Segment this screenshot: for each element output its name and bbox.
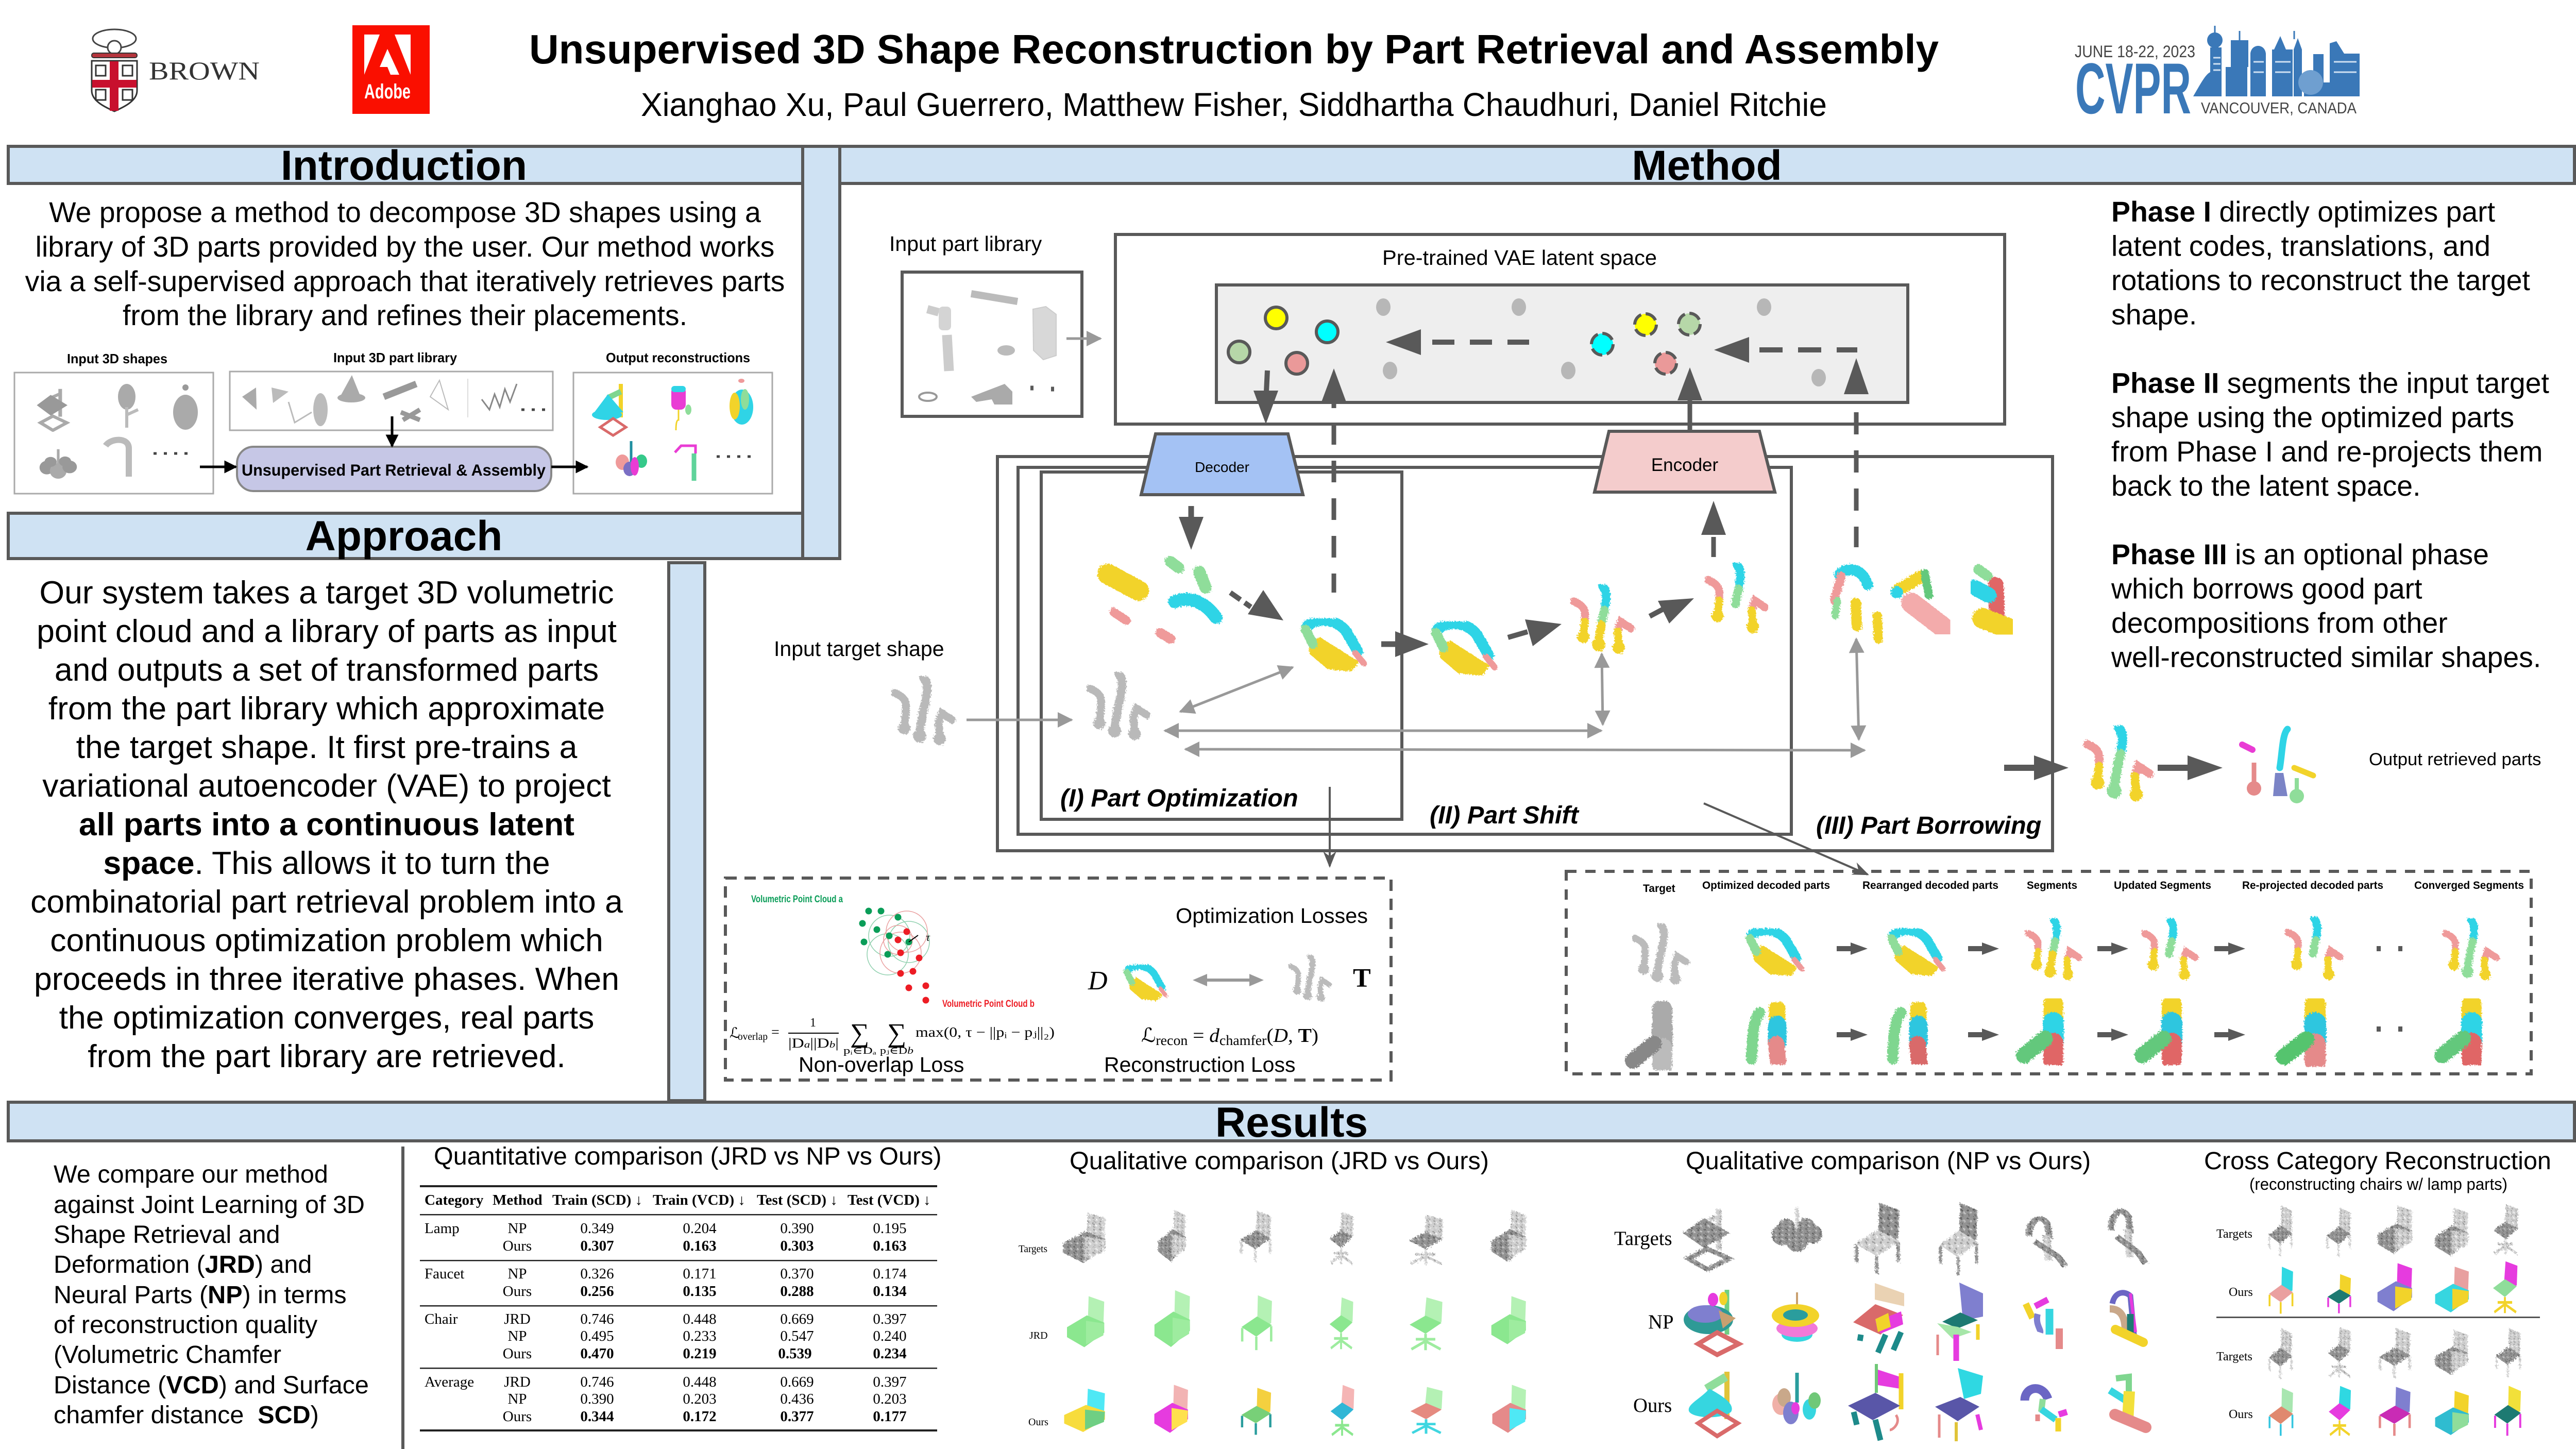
- row labels: cross category: Ours: [2229, 1408, 2253, 1421]
- label: optimization losses: Optimization Losses: [1176, 904, 1368, 928]
- text block: approach: the target shape. It first pre-trains a: [76, 729, 578, 765]
- panel: method header: [840, 142, 2574, 189]
- table: quantitative results: 0.177: [873, 1408, 907, 1425]
- block: Unsupervised Part Retrieval & Assembly: [237, 447, 551, 491]
- logo: CVPR 2023: CVPR: [2075, 48, 2191, 129]
- borrowed shape 2: [1891, 573, 1945, 629]
- panel: part library: [230, 372, 553, 430]
- table: quantitative results: Train (SCD) ↓: [552, 1192, 642, 1208]
- label: reconstruction loss: Reconstruction Loss: [1104, 1053, 1295, 1076]
- table: quantitative results: NP: [507, 1266, 527, 1282]
- decoder block: Decoder: [1195, 459, 1249, 475]
- table: quantitative results: 0.163: [683, 1238, 717, 1254]
- decoded parts (scattered): [1108, 562, 1216, 639]
- table: quantitative results: Method: [493, 1192, 543, 1208]
- text block: phases: from Phase I and re-projects them: [2111, 436, 2543, 468]
- table: quantitative results: Faucet: [425, 1266, 464, 1282]
- row labels: NP comparison: NP: [1648, 1311, 1673, 1333]
- table: quantitative results: NP: [507, 1220, 527, 1237]
- table: quantitative results: 0.233: [683, 1328, 717, 1344]
- text block: phases: Phase III is an optional phase: [2111, 538, 2489, 570]
- table: quantitative results: 0.390: [580, 1391, 614, 1407]
- table: quantitative results: 0.172: [683, 1408, 717, 1425]
- table: quantitative results: 0.303: [780, 1238, 814, 1254]
- arrow: output 2: [2158, 755, 2223, 780]
- latent codes (left): [1228, 307, 1338, 374]
- panel: optimization losses: [725, 878, 1391, 1080]
- equation: overlap loss: ∑: [887, 1019, 906, 1048]
- column headers: Segments: [2027, 880, 2077, 891]
- panel: pre-trained VAE latent space: [1115, 234, 2005, 424]
- equation: reconstruction loss: (: [1266, 1025, 1274, 1047]
- text block: approach: variational autoencoder (VAE) to project: [42, 768, 611, 804]
- table: quantitative results: 0.390: [780, 1220, 814, 1237]
- assembled parts (phase I): [1306, 620, 1364, 671]
- table: quantitative results: Lamp: [425, 1220, 460, 1237]
- label: non-overlap loss: Non-overlap Loss: [799, 1053, 964, 1076]
- row labels: cross category: Targets: [2216, 1227, 2252, 1241]
- chart: two point clouds: [859, 908, 930, 1004]
- table: quantitative results: 0.288: [780, 1283, 814, 1300]
- text block: results summary: of reconstruction quality: [54, 1311, 318, 1339]
- logo: Adobe: [352, 25, 430, 114]
- heading: quantitative comparison: Quantitative comparison (JRD vs NP vs Ours): [434, 1142, 942, 1170]
- row: JRD comparison targets: [1063, 1210, 1526, 1265]
- chart: introduction overview figure: [14, 350, 772, 494]
- panel: results header: [8, 1099, 2574, 1146]
- equation: overlap loss: pⱼ∈D b: [880, 1046, 913, 1056]
- panel: pre-trained VAE latent space: Pre-trained VAE latent space: [1382, 246, 1657, 269]
- logo: Adobe: Adobe: [364, 80, 411, 103]
- table: quantitative results: 0.256: [580, 1283, 614, 1300]
- label: output reconstructions: Output reconstructions: [606, 350, 750, 365]
- chart: two point clouds: τ: [926, 931, 930, 943]
- equation: reconstruction loss: chamfer: [1219, 1033, 1266, 1048]
- label: point cloud b: Volumetric Point Cloud b: [942, 999, 1035, 1009]
- column headers: Target: [1643, 883, 1675, 895]
- table: quantitative results: Test (VCD) ↓: [848, 1192, 931, 1208]
- table: quantitative results: 0.669: [780, 1311, 814, 1327]
- row labels: NP comparison: [1614, 1228, 1673, 1417]
- row labels: cross category: [2216, 1227, 2253, 1421]
- table: quantitative results: 0.219: [683, 1345, 717, 1362]
- equation: reconstruction loss: D, T): [1274, 1025, 1318, 1047]
- text block: phases: Phase II segments the input target: [2111, 367, 2549, 399]
- table: quantitative results: Ours: [503, 1238, 532, 1254]
- latent codes (right): [1591, 313, 1700, 374]
- row labels: JRD comparison: Ours: [1028, 1417, 1048, 1428]
- arrow: dashed up to latent (phase I): [1321, 368, 1346, 593]
- row labels: JRD comparison: [1019, 1243, 1048, 1428]
- input target point cloud: [894, 678, 952, 745]
- panel: vertical band beside approach: [669, 563, 705, 1101]
- text block: phases: which borrows good part: [2111, 573, 2422, 605]
- arrow: dashed up to latent (phase III): [1844, 358, 1869, 547]
- text block: approach: from the part library which approximate: [48, 690, 605, 727]
- heading: qualitative JRD vs Ours: Qualitative comparison (JRD vs Ours): [1070, 1147, 1489, 1175]
- table: quantitative results: 0.377: [780, 1408, 814, 1425]
- output segmented shape: [2087, 728, 2149, 801]
- text block: results summary: against Joint Learning of 3D: [54, 1191, 365, 1219]
- equation: overlap loss: overlap: [738, 1031, 768, 1042]
- text block: approach: continuous optimization problem which: [50, 922, 603, 958]
- label: output retrieved parts: Output retrieved parts: [2369, 750, 2541, 769]
- table: quantitative results: JRD: [504, 1311, 531, 1327]
- logo: CVPR 2023: JUNE 18-22, 2023: [2075, 42, 2195, 61]
- arrows: latent shifts: [1386, 329, 1857, 363]
- row: cross category targets 1: [2269, 1205, 2518, 1256]
- text block: phases: well-reconstructed similar shapes.: [2111, 641, 2541, 673]
- text block: approach: all parts into a continuous latent: [79, 806, 574, 843]
- logo: Brown: BROWN: [149, 56, 260, 85]
- panel: approach header: [8, 513, 803, 560]
- symbol T with target shape: T: [1353, 964, 1371, 993]
- row: cross category ours 1: [2269, 1261, 2517, 1313]
- row labels: cross category: Targets: [2216, 1350, 2252, 1363]
- row: Ours reconstructions (chairs): [1064, 1385, 1526, 1436]
- updated segments: [1708, 565, 1765, 633]
- text block: results summary: Shape Retrieval and: [54, 1221, 280, 1249]
- arrow: dashed parts to assembly: [1230, 590, 1283, 620]
- table: quantitative results: 0.746: [580, 1311, 614, 1327]
- row labels: JRD comparison: JRD: [1029, 1330, 1048, 1341]
- segments: [1573, 586, 1631, 654]
- text block: phases: shape.: [2111, 299, 2197, 331]
- row: Ours results (NP comparison): [1689, 1364, 2146, 1441]
- double arrow: [1193, 974, 1264, 986]
- table: quantitative results: 0.495: [580, 1328, 614, 1344]
- table: quantitative results: NP: [507, 1391, 527, 1407]
- table: quantitative results: 0.539: [778, 1345, 812, 1362]
- arrow: library to latent space: [1066, 337, 1100, 340]
- row: cross category ours 2: [2269, 1386, 2521, 1436]
- equation: reconstruction loss: d: [1209, 1025, 1220, 1047]
- arrow: decoder output: [1179, 506, 1204, 550]
- text block: introduction: via a self-supervised approach that iteratively retrieves parts: [25, 265, 785, 297]
- heading: qualitative NP vs Ours: Qualitative comparison (NP vs Ours): [1686, 1147, 2091, 1175]
- column headers: Optimized decoded parts: [1702, 880, 1830, 891]
- equation: overlap loss: ∑: [850, 1019, 869, 1048]
- table: quantitative results: Ours: [503, 1345, 532, 1362]
- arrow: to optimization losses: [1329, 787, 1331, 866]
- table: quantitative results: 0.370: [780, 1266, 814, 1282]
- label: input shapes: Input 3D shapes: [67, 351, 167, 366]
- rearranged parts (phase II): [1436, 624, 1495, 676]
- column headers: Rearranged decoded parts: [1862, 880, 1998, 891]
- table: quantitative results: 0.174: [873, 1266, 907, 1282]
- block: Unsupervised Part Retrieval & Assembly: Unsupervised Part Retrieval & Assembly: [242, 461, 546, 479]
- chart: method pipeline diagram: [774, 232, 2541, 874]
- table: quantitative results: Chair: [425, 1311, 458, 1327]
- text block: approach: combinatorial part retrieval problem into a: [30, 884, 623, 920]
- text block: approach: space. This allows it to turn the: [103, 845, 550, 881]
- arrow: rearranged to segments: [1508, 619, 1562, 646]
- divider: cross category: [2216, 1317, 2540, 1318]
- equation: overlap loss: max(0, τ − ||pᵢ − pⱼ||₂): [916, 1024, 1055, 1040]
- table: quantitative results: Train (VCD) ↓: [653, 1192, 745, 1208]
- symbol D with assembled shape: [1088, 966, 1166, 1001]
- text block: phases: shape using the optimized parts: [2111, 401, 2514, 433]
- table: quantitative results: Category: [425, 1192, 484, 1208]
- text block: approach: from the part library are retrieved.: [88, 1038, 566, 1074]
- label: phase III: (III) Part Borrowing: [1816, 812, 2041, 839]
- table: quantitative results: 0.326: [580, 1266, 614, 1282]
- logo: Brown: [92, 29, 260, 111]
- text block: introduction: library of 3D parts provided by the user. Our method works: [36, 231, 774, 263]
- other latent points: [1376, 298, 1826, 386]
- encoder block: Encoder: [1651, 455, 1719, 475]
- table: quantitative results: 0.746: [580, 1374, 614, 1390]
- panel: output reconstructions: [573, 373, 772, 494]
- row: cross category targets 2: [2269, 1327, 2521, 1379]
- text block: results summary: Deformation (JRD) and: [54, 1251, 312, 1278]
- table: quantitative results: 0.448: [683, 1311, 717, 1327]
- label: input part library: Input part library: [889, 232, 1042, 256]
- table: quantitative results: 0.547: [780, 1328, 814, 1344]
- panel: approach header: Approach: [306, 513, 502, 560]
- equation: reconstruction loss: recon: [1156, 1033, 1188, 1048]
- divider: results column: [401, 1147, 404, 1449]
- panel: introduction header: Introduction: [281, 142, 527, 189]
- text block: introduction: We propose a method to decompose 3D shapes using a: [49, 196, 761, 228]
- text block: results summary: Neural Parts (NP) in terms: [54, 1281, 347, 1309]
- table: quantitative results: NP: [507, 1328, 527, 1344]
- text block: results summary: (Volumetric Chamfer: [54, 1341, 281, 1369]
- table: quantitative results: 0.397: [873, 1311, 907, 1327]
- decoder block: [1141, 434, 1303, 495]
- table: quantitative results: 0.470: [580, 1345, 614, 1362]
- text block: phases: Phase I directly optimizes part: [2111, 196, 2495, 228]
- table: quantitative results: 0.240: [873, 1328, 907, 1344]
- table: quantitative results: 0.203: [683, 1391, 717, 1407]
- nested phase boxes: [997, 457, 2053, 851]
- text block: approach: proceeds in three iterative phases. When: [34, 961, 619, 997]
- authors: Xianghao Xu, Paul Guerrero, Matthew Fisher, Siddhartha Chaudhuri, Daniel Ritchie: [641, 87, 1827, 123]
- text block: approach: point cloud and a library of parts as input: [37, 613, 617, 649]
- table: quantitative results: 0.448: [683, 1374, 717, 1390]
- table: quantitative results: 0.307: [580, 1238, 614, 1254]
- row labels: JRD comparison: Targets: [1019, 1243, 1047, 1255]
- row labels: NP comparison: Targets: [1614, 1228, 1672, 1250]
- arrow: decoder input: [1253, 370, 1278, 424]
- table: quantitative results: 0.204: [683, 1220, 717, 1237]
- table: quantitative results: 0.397: [873, 1374, 907, 1390]
- encoder block: [1595, 431, 1775, 492]
- column headers: [1643, 880, 2524, 895]
- equation: reconstruction loss: =: [1188, 1025, 1209, 1047]
- table: quantitative results: [420, 1185, 937, 1431]
- label: phase I: (I) Part Optimization: [1060, 784, 1298, 812]
- row 1: lamp shapes: [1635, 919, 2496, 984]
- arrow: phase I to II: [1381, 631, 1429, 657]
- table: quantitative results: 0.195: [873, 1220, 907, 1237]
- equation: overlap loss: ℒ: [730, 1025, 740, 1041]
- arrow: to converged segments panel: [1704, 803, 1868, 874]
- label: point cloud a: Volumetric Point Cloud a: [751, 894, 843, 905]
- text block: approach: and outputs a set of transformed parts: [55, 652, 599, 688]
- text block: phases: decompositions from other: [2111, 607, 2448, 639]
- borrowed shape 3: [1974, 569, 2009, 629]
- arrow: encoder to latent: [1677, 367, 1702, 433]
- table: quantitative results: Ours: [503, 1408, 532, 1425]
- panel: method header: Method: [1632, 142, 1782, 189]
- table: quantitative results: Test (SCD) ↓: [757, 1192, 838, 1208]
- text block: results summary: We compare our method: [54, 1160, 328, 1188]
- title: Unsupervised 3D Shape Reconstruction by Part Retrieval and Assembly: [529, 26, 1939, 72]
- logo: CVPR 2023: VANCOUVER, CANADA: [2201, 99, 2357, 117]
- text block: results summary: [54, 1160, 369, 1429]
- panel: vertical band beside introduction: [803, 146, 840, 559]
- table: quantitative results: 0.163: [873, 1238, 907, 1254]
- row labels: NP comparison: Ours: [1633, 1395, 1672, 1417]
- equation: overlap loss: |D a||D b|: [788, 1036, 839, 1051]
- table: quantitative results: Ours: [503, 1283, 532, 1300]
- logo: CVPR 2023: [2075, 26, 2360, 129]
- table: quantitative results: 0.344: [580, 1408, 614, 1425]
- text block: introduction: from the library and refines their placements.: [123, 299, 687, 331]
- column headers: Re-projected decoded parts: [2242, 880, 2383, 891]
- panel: optimization stages: [1566, 871, 2531, 1074]
- text block: phases: rotations to reconstruct the target: [2111, 264, 2530, 296]
- small arrows between stages: [1837, 942, 2402, 1041]
- text block: phases: latent codes, translations, and: [2111, 230, 2490, 262]
- table: quantitative results: 0.134: [873, 1283, 907, 1300]
- symbol D with assembled shape: D: [1088, 966, 1108, 996]
- arrow: to encoder: [1701, 501, 1726, 557]
- table: quantitative results: 0.135: [683, 1283, 717, 1300]
- equation: overlap loss: pᵢ∈Dₐ: [843, 1046, 876, 1056]
- symbol T with target shape: [1291, 956, 1371, 1002]
- table: quantitative results: 0.349: [580, 1220, 614, 1237]
- table: quantitative results: 0.171: [683, 1266, 717, 1282]
- table: quantitative results: 0.669: [780, 1374, 814, 1390]
- panel: input shapes: [14, 373, 213, 494]
- label: part library: Input 3D part library: [333, 350, 457, 365]
- label: phase II: (II) Part Shift: [1430, 801, 1580, 829]
- equation: overlap loss: 1: [810, 1016, 816, 1030]
- subheading: cross category: (reconstructing chairs w/ lamp parts): [2249, 1175, 2507, 1193]
- column headers: Updated Segments: [2114, 880, 2211, 891]
- arrow: segments to updated segments: [1650, 598, 1694, 624]
- text block: approach: Our system takes a target 3D volumetric: [40, 575, 614, 611]
- inner target point cloud: [1090, 674, 1147, 740]
- equation: overlap loss: =: [771, 1024, 779, 1040]
- panel: part library thumbnails: [902, 272, 1082, 416]
- equation: overlap loss: [730, 1016, 1055, 1056]
- text block: approach: the optimization converges, real parts: [59, 1000, 594, 1036]
- row: JRD reconstructions: [1067, 1290, 1526, 1350]
- equation: reconstruction loss: ℒ: [1141, 1025, 1155, 1047]
- row labels: cross category: Ours: [2229, 1286, 2253, 1299]
- table: quantitative results: 0.234: [873, 1345, 907, 1362]
- table: quantitative results: 0.203: [873, 1391, 907, 1407]
- label: input target shape: Input target shape: [774, 637, 944, 661]
- panel: results header: Results: [1215, 1099, 1368, 1146]
- arrow: output 1: [2004, 755, 2069, 780]
- table: quantitative results: 0.436: [780, 1391, 814, 1407]
- table: quantitative results: JRD: [504, 1374, 531, 1390]
- text block: introduction: [25, 196, 785, 331]
- text block: phases: [2111, 196, 2549, 673]
- output retrieved parts: [2242, 729, 2313, 803]
- row: NP comparison targets: [1683, 1203, 2145, 1275]
- row: NP results: [1684, 1283, 2143, 1361]
- table: quantitative results: Average: [425, 1374, 474, 1390]
- arrows: overview flow: [200, 416, 587, 467]
- text block: approach: [30, 575, 623, 1074]
- row 2: chair-like shapes: [1633, 1004, 2471, 1065]
- arrows: comparison with target: [967, 639, 1865, 750]
- heading: cross category reconstruction: Cross Category Reconstruction: [2204, 1147, 2551, 1175]
- column headers: Converged Segments: [2414, 880, 2524, 891]
- text block: results summary: Distance (VCD) and Surface: [54, 1371, 369, 1399]
- text block: results summary: chamfer distance SCD): [54, 1401, 319, 1429]
- borrowed shape 1: [1834, 569, 1878, 639]
- panel: introduction header: [8, 142, 803, 189]
- text block: phases: back to the latent space.: [2111, 470, 2420, 502]
